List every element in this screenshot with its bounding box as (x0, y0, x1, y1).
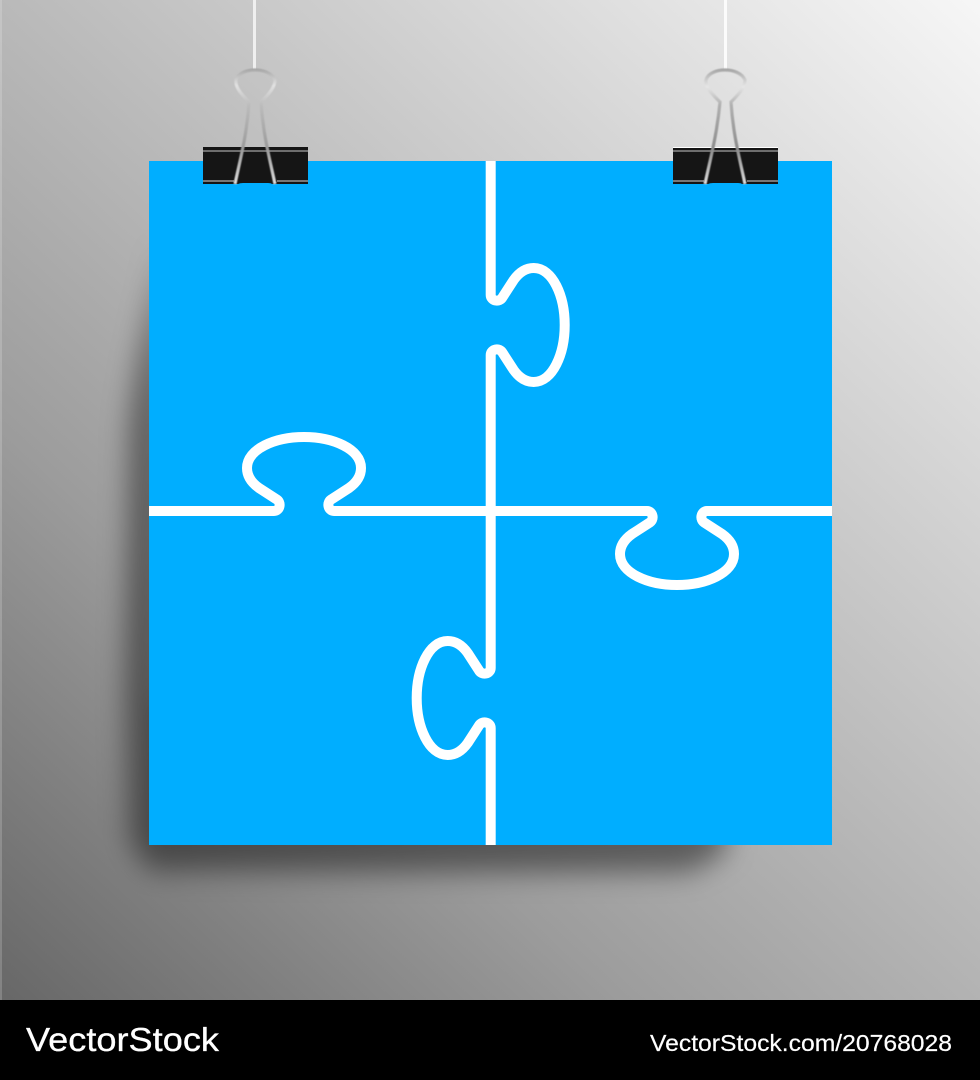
poster shadow (126, 240, 726, 872)
left binder clip (203, 70, 308, 184)
right string (724, 0, 727, 71)
puzzle poster panel (149, 161, 832, 845)
footer brand: VectorStock (26, 1022, 219, 1059)
footer image id: VectorStock.com/20768028 (650, 1030, 952, 1056)
horizontal puzzle seam with tabs (149, 437, 832, 585)
left clip wire (235, 70, 275, 184)
vertical puzzle seam with tabs (417, 161, 565, 845)
right binder clip (673, 70, 778, 184)
footer bar (0, 1000, 980, 1080)
left string (253, 0, 256, 71)
right clip wire (705, 70, 745, 184)
